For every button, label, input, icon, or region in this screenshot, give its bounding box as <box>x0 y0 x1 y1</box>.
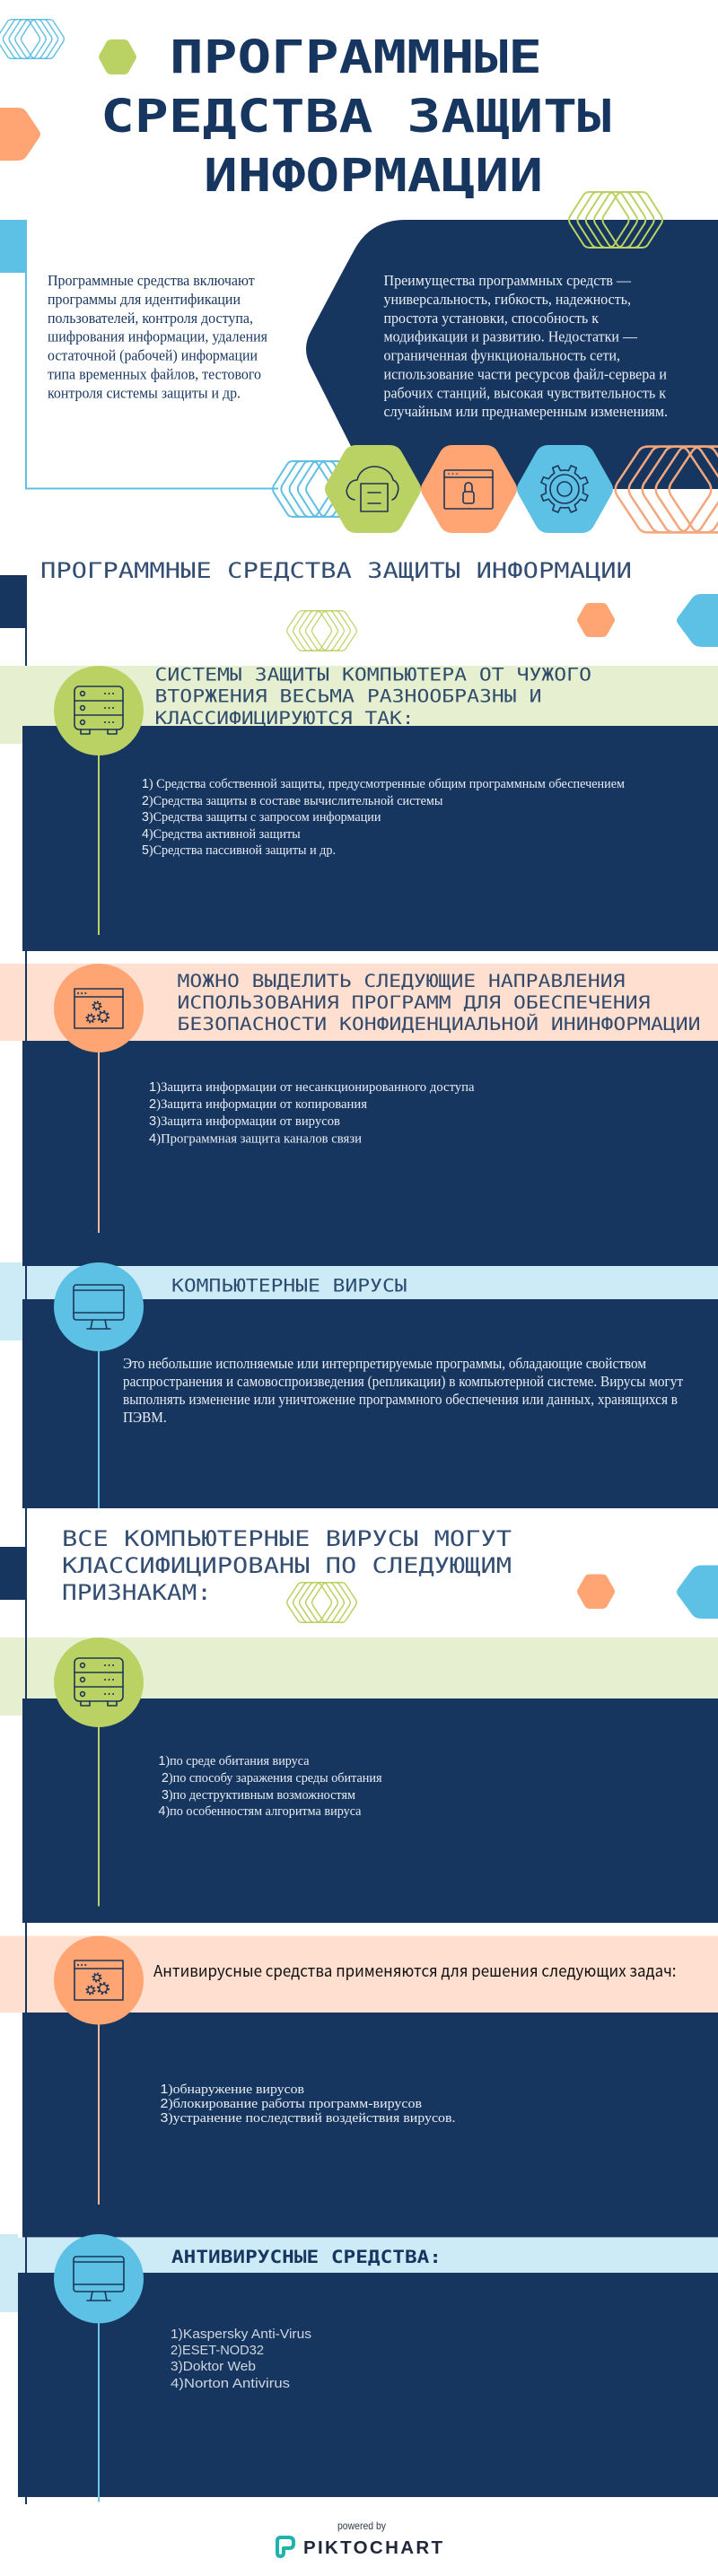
text: intro left: программы для идентификации <box>48 291 241 308</box>
footer: piktochart logo <box>277 2519 442 2558</box>
list: 1)по среде обитания вируса <box>158 1753 310 1768</box>
section heading: virus classification <box>62 1526 512 1605</box>
icon: server <box>54 1637 144 1727</box>
decorative rings: orange right <box>616 447 718 532</box>
list: 3)устранение последствий воздействия вирусов. <box>160 2110 456 2126</box>
panel: computer viruses <box>0 1262 718 1508</box>
heading: КЛАССИФИЦИРУЮТСЯ ТАК: <box>154 708 415 729</box>
icon: window gears <box>54 964 144 1052</box>
navy left tab <box>0 575 27 628</box>
heading <box>178 971 700 1035</box>
text: advantages right: использование части ресурсов файл-сервера и <box>384 366 667 382</box>
decorative rings: green middle <box>287 611 356 651</box>
list <box>142 776 625 858</box>
text: intro left: пользователей, контроля доступа, <box>48 310 253 327</box>
navy left tab <box>0 1547 27 1600</box>
section heading: virus classification: ПРИЗНАКАМ: <box>62 1580 212 1605</box>
panel: virus features <box>0 1637 718 1923</box>
title <box>101 31 611 203</box>
panel: antivirus tools <box>0 2234 718 2502</box>
list: 4)по особенностям алгоритма вируса <box>158 1803 362 1819</box>
list: 4)Средства активной защиты <box>142 826 301 842</box>
paragraph: распространения и самовоспроизведения (репликации) в компьютерной системе. Вирусы могут <box>123 1373 683 1390</box>
paragraph: Это небольшие исполняемые или интерпретируемые программы, обладающие свойством <box>123 1355 647 1372</box>
section heading: virus classification: КЛАССИФИЦИРОВАНЫ ПО СЛЕДУЮЩИМ <box>62 1553 512 1578</box>
panel: protection systems <box>0 664 718 951</box>
icon: cloud server hexagon <box>325 445 421 533</box>
list <box>160 2082 456 2126</box>
list: 5)Средства пассивной защиты и др. <box>142 843 336 858</box>
title: ПРОГРАММНЫЕ <box>170 31 542 84</box>
list: 2)Средства защиты в составе вычислительной системы <box>142 793 442 808</box>
list: 2)блокирование работы программ-вирусов <box>160 2096 422 2111</box>
heading: МОЖНО ВЫДЕЛИТЬ СЛЕДУЮЩИЕ НАПРАВЛЕНИЯ <box>178 971 625 991</box>
connector line <box>98 1349 100 1508</box>
text: advantages right: рабочих станций, высокая чувствительность к <box>384 384 667 402</box>
heading: СИСТЕМЫ ЗАЩИТЫ КОМПЬЮТЕРА ОТ ЧУЖОГО <box>154 664 591 685</box>
hexagon: blue right edge <box>677 1565 718 1619</box>
heading: Антивирусные средства применяются для решения следующих задач: <box>153 1959 677 1982</box>
list <box>149 1079 475 1147</box>
hexagon: green title accent <box>99 39 136 74</box>
hexagon: orange small <box>577 603 615 637</box>
list: 2)ESET-NOD32 <box>171 2343 264 2358</box>
text: advantages right <box>384 272 668 420</box>
list: 2)Защита информации от копирования <box>149 1096 367 1112</box>
decorative rings: blue behind icons <box>273 461 365 517</box>
heading: БЕЗОПАСНОСТИ КОНФИДЕНЦИАЛЬНОЙ ИНИНФОРМАЦИИ <box>178 1014 700 1035</box>
text: intro left: шифрования информации, удаления <box>48 328 267 345</box>
decorative rings: green <box>287 1583 356 1622</box>
heading: ИСПОЛЬЗОВАНИЯ ПРОГРАММ ДЛЯ ОБЕСПЕЧЕНИЯ <box>178 992 650 1013</box>
decorative rings: top left <box>0 20 64 58</box>
title: СРЕДСТВА ЗАЩИТЫ <box>101 91 611 144</box>
icon: window lock hexagon <box>421 445 517 533</box>
list: 1) Средства собственной защиты, предусмотренные общим программным обеспечением <box>142 776 625 791</box>
text: intro left: Программные средства включают <box>48 272 255 289</box>
list: 4)Norton Antivirus <box>171 2376 290 2391</box>
heading <box>154 664 591 729</box>
connector line <box>98 1051 100 1233</box>
list: 1)Kaspersky Anti-Virus <box>171 2327 311 2342</box>
navy timeline line <box>25 628 27 2504</box>
text: advantages right: модификации и развитию. Недостатки — <box>384 328 637 345</box>
list <box>171 2327 311 2391</box>
list: 1)обнаружение вирусов <box>160 2082 304 2097</box>
decorative rings: green over panel <box>569 192 662 248</box>
section heading: ПРОГРАММНЫЕ СРЕДСТВА ЗАЩИТЫ ИНФОРМАЦИИ <box>40 558 632 583</box>
footer: piktochart logo: PIKTOCHART <box>303 2537 442 2558</box>
text: intro left <box>48 272 267 402</box>
panel: directions of use <box>0 951 718 1266</box>
text: advantages right: Преимущества программных средств — <box>384 272 631 289</box>
paragraph: ПЭВМ. <box>123 1409 167 1426</box>
panel: advantages navy shape <box>306 220 718 489</box>
text: advantages right: простота установки, способность к <box>384 310 600 327</box>
list: 2)по способу заражения среды обитания <box>162 1770 382 1786</box>
icon: monitor <box>54 1262 144 1351</box>
list <box>158 1753 382 1819</box>
list: 4)Программная защита каналов связи <box>149 1131 362 1147</box>
connector line <box>98 2022 100 2205</box>
heading: АНТИВИРУСНЫЕ СРЕДСТВА: <box>171 2247 442 2267</box>
intro left frame <box>0 220 278 488</box>
connector line <box>98 1725 100 1906</box>
heading: ВТОРЖЕНИЯ ВЕСЬМА РАЗНООБРАЗНЫ И <box>154 685 542 707</box>
text: intro left: остаточной (рабочей) информации <box>48 346 258 364</box>
icon: server <box>54 666 144 755</box>
section heading: virus classification: ВСЕ КОМПЬЮТЕРНЫЕ ВИРУСЫ МОГУТ <box>62 1526 512 1551</box>
footer: piktochart logo: powered by <box>337 2519 386 2532</box>
list: 3)Защита информации от вирусов <box>149 1113 340 1129</box>
text: advantages right: универсальность, гибкость, надежность, <box>384 291 631 308</box>
connector line <box>98 2321 100 2502</box>
text: intro left: типа временных файлов, тестового <box>48 366 261 382</box>
paragraph: выполнять изменение или уничтожение программного обеспечения или данных, хранящихся в <box>123 1391 678 1408</box>
list: 3)Средства защиты с запросом информации <box>142 809 381 825</box>
title: ИНФОРМАЦИИ <box>204 150 543 203</box>
list: 3)Doktor Web <box>171 2359 256 2374</box>
panel: antivirus tasks <box>0 1923 718 2238</box>
hexagon: orange small <box>577 1574 615 1609</box>
icon: monitor <box>54 2234 144 2323</box>
icon: gear hexagon <box>517 445 613 533</box>
paragraph <box>123 1355 683 1426</box>
heading: КОМПЬЮТЕРНЫЕ ВИРУСЫ <box>171 1276 407 1297</box>
text: intro left: контроля системы защиты и др. <box>48 384 241 402</box>
text: advantages right: случайным или преднамеренным изменениям. <box>384 403 668 420</box>
text: advantages right: ограниченная функциональность сети, <box>384 346 620 364</box>
list: 1)Защита информации от несанкционированного доступа <box>149 1079 475 1095</box>
connector line <box>98 754 100 935</box>
hexagon: orange left edge <box>0 108 40 161</box>
hexagon: blue right edge <box>677 594 718 647</box>
list: 3)по деструктивным возможностям <box>162 1787 355 1803</box>
icon: window gears <box>54 1936 144 2024</box>
